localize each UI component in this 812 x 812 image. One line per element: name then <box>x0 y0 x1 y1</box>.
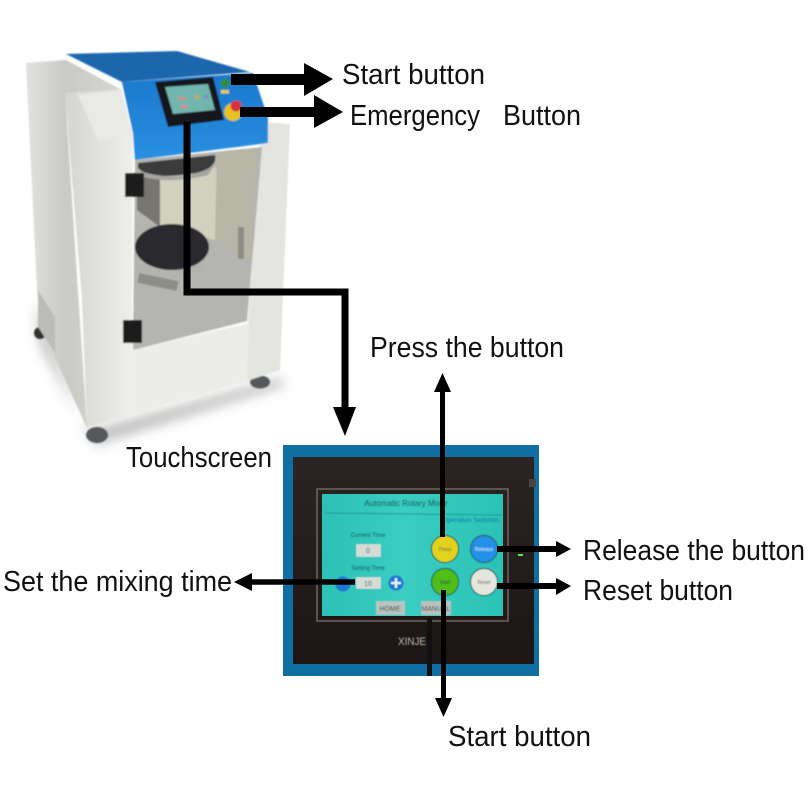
label: emergency button: Button <box>503 100 581 132</box>
arrow: reset button <box>497 578 571 595</box>
XINJE brand: XINJE <box>398 636 426 648</box>
home button <box>376 601 405 615</box>
large touchscreen photo: HOME <box>380 606 401 613</box>
hinges <box>125 173 144 197</box>
arrow: start button <box>231 63 333 96</box>
large touchscreen photo: 10 <box>364 581 372 588</box>
press button, yellow <box>432 536 458 562</box>
front right panel <box>247 122 290 381</box>
large touchscreen photo: MANUAL <box>421 606 451 613</box>
arrow: press the button <box>434 373 451 537</box>
vent <box>38 290 55 353</box>
blue front fascia <box>122 73 268 160</box>
front left panel <box>65 90 133 428</box>
minus and plus buttons <box>336 576 350 592</box>
floor shadow <box>36 300 286 445</box>
label: press the button: Press the button <box>370 332 564 364</box>
large touchscreen photo: 0 <box>366 548 370 555</box>
lower turntable <box>135 224 209 270</box>
large touchscreen photo: Reset <box>477 580 491 586</box>
small touchscreen buttons <box>178 94 208 108</box>
chamfer facet <box>78 90 133 140</box>
screen texts: Automatic Rotary Mixer <box>364 499 448 508</box>
large touchscreen photo: Setting Time <box>351 566 385 572</box>
reset button, white <box>470 568 498 596</box>
large touchscreen photo: Release <box>475 547 493 553</box>
side panel <box>26 60 122 428</box>
feet <box>34 327 270 443</box>
large touchscreen photo: Start <box>440 580 451 586</box>
arrow: emergency button <box>240 95 343 128</box>
small touchscreen <box>165 84 215 114</box>
large touchscreen photo: Operation Switches <box>443 517 500 524</box>
label: start button: Start button <box>342 59 485 91</box>
chamber window <box>133 147 262 350</box>
green start button <box>220 78 230 88</box>
label: touchscreen: Touchscreen <box>126 442 272 474</box>
machine photo <box>26 51 290 445</box>
label: set the mixing time: Set the mixing time <box>3 566 232 598</box>
blue lid top <box>66 51 250 82</box>
back wall <box>160 167 217 240</box>
start button, green <box>432 568 458 596</box>
mechanism <box>137 273 179 291</box>
release button, blue <box>470 536 498 562</box>
arrow: release the button <box>497 541 571 557</box>
touchscreen arrowhead <box>333 407 356 436</box>
control panel bezel <box>155 77 224 127</box>
label: reset button: Reset button <box>583 575 733 607</box>
arrow: touchscreen connector <box>187 122 345 412</box>
connector line below screen <box>427 618 432 676</box>
label: start button below: Start button <box>448 721 591 753</box>
large touchscreen photo <box>283 445 539 676</box>
current time field <box>356 544 381 557</box>
arrow: start button on touchscreen <box>435 590 452 717</box>
led and knob <box>518 554 523 556</box>
setting time field <box>356 577 381 589</box>
label: emergency button: Emergency <box>350 100 480 132</box>
latch <box>238 227 244 259</box>
arrow: set the mixing time <box>234 573 355 591</box>
large touchscreen photo: Current Time <box>351 533 386 539</box>
bottom front panel <box>132 323 249 415</box>
red emergency button <box>224 103 242 121</box>
left dark wall <box>137 173 160 227</box>
large touchscreen photo: Press <box>439 547 452 553</box>
right wall <box>215 148 257 262</box>
upper turntable <box>138 155 215 176</box>
manual button <box>421 601 451 615</box>
